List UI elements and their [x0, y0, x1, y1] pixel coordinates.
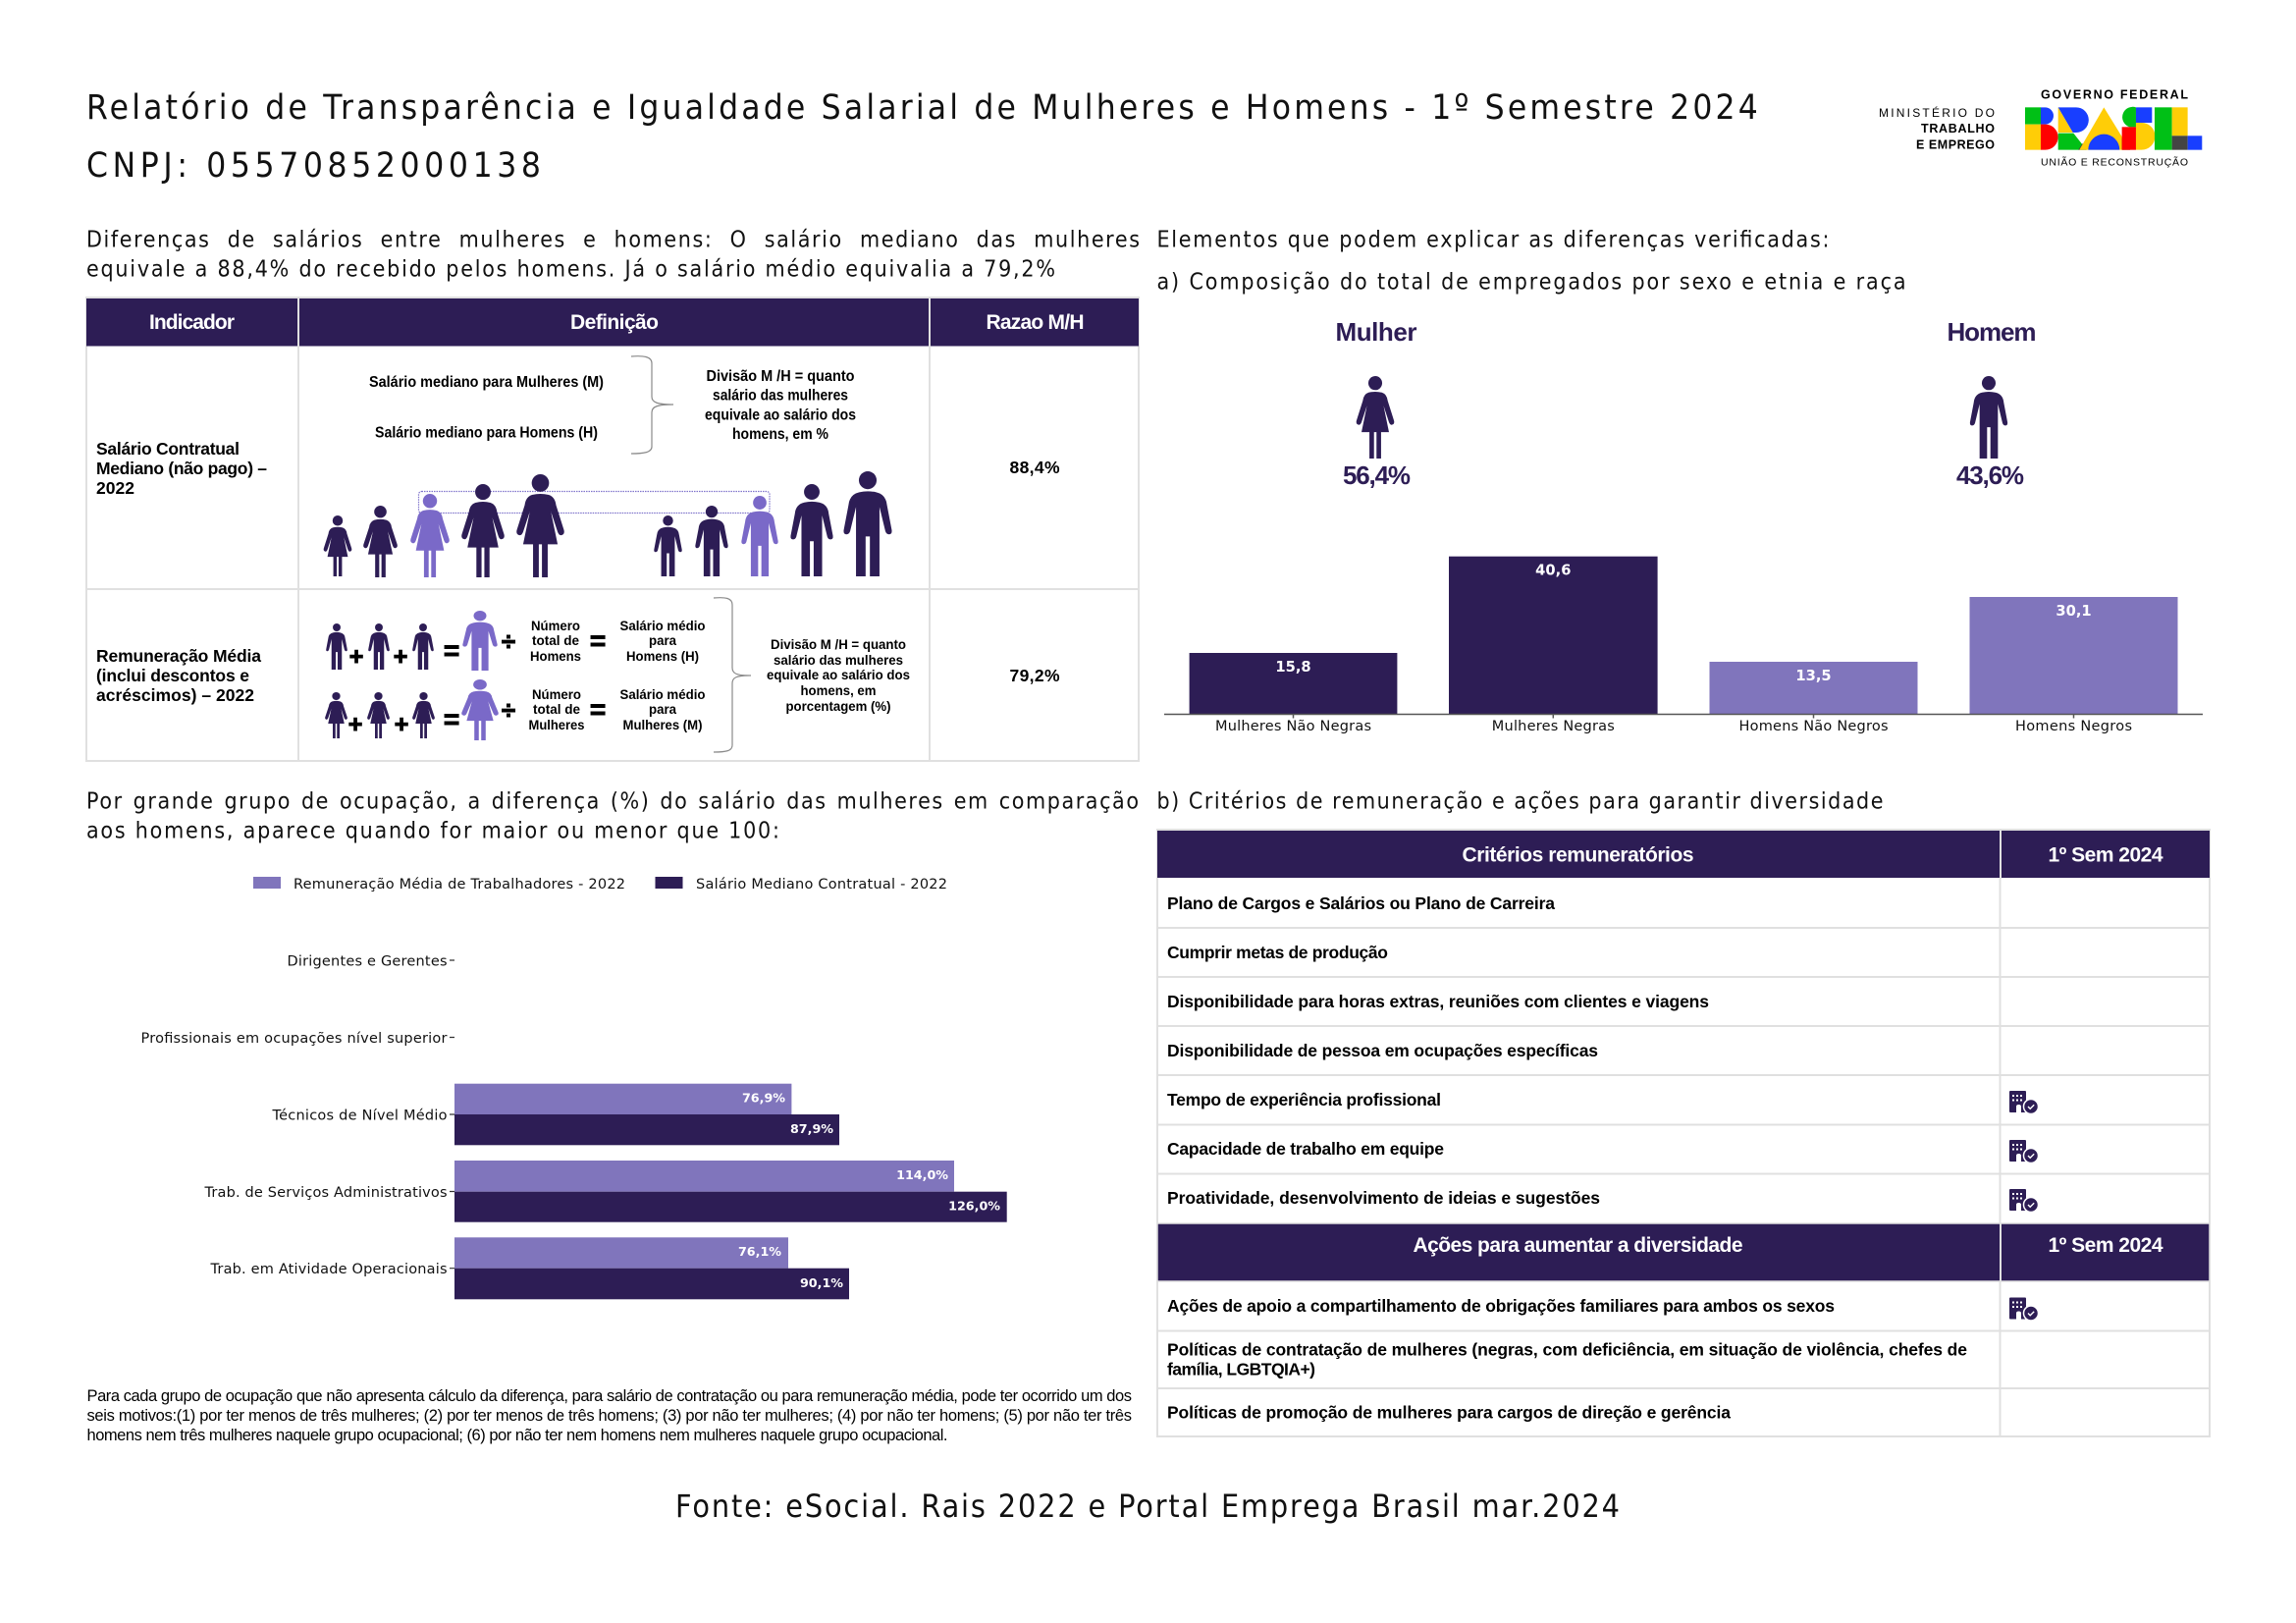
occupation heading [86, 789, 1139, 844]
panel: indicator table [86, 298, 1139, 761]
category labels: Trab. em Atividade Operacionais [210, 1262, 448, 1277]
row 1 indicator label [96, 439, 267, 498]
right column heading [1156, 228, 1906, 296]
panel: men share [1948, 317, 2036, 490]
row 2 formula: men: = [590, 625, 606, 656]
intro text: salary differences [86, 228, 1140, 283]
title [86, 86, 1758, 185]
row 2 brace and division note: salário das mulheres [774, 652, 903, 668]
row 2 formula: men: Salário médio [620, 618, 705, 633]
title: CNPJ: 05570852000138 [86, 144, 541, 185]
row 2 formula: women [325, 679, 705, 740]
row 2 formula: women: + [348, 711, 362, 738]
row 2 formula: men: Homens (H) [626, 648, 699, 664]
diversity rows: Políticas de promoção de mulheres para cargos de direção e gerência [1167, 1402, 1731, 1422]
row 2 formula: men: ÷ [502, 626, 515, 656]
row 2 formula: women: Mulheres [528, 717, 585, 732]
logo: Ministério do Trabalho e Emprego / Governo Federal: UNIÃO E RECONSTRUÇÃO [2041, 155, 2188, 169]
table header: Definição [570, 311, 659, 334]
row 2 formula: women: para [649, 701, 676, 717]
row 2 indicator label [96, 646, 261, 705]
criteria rows: Cumprir metas de produção [1167, 943, 1388, 962]
bars: Trab. em Atividade Operacionais [454, 1237, 849, 1299]
row 2 formula: women: Salário médio [620, 686, 705, 702]
right column heading: Elementos que podem explicar as diferenças verificadas: [1156, 228, 1829, 253]
chart legend: Salário Mediano Contratual - 2022 [696, 877, 947, 893]
icon: building check [2009, 1189, 2038, 1212]
bar: Mulheres Negras: 40,6 [1535, 563, 1571, 579]
bar: Mulheres Não Negras: Mulheres Não Negras [1215, 719, 1371, 734]
panel: men share: 43,6% [1956, 460, 2024, 490]
diversity rows: Ações de apoio a compartilhamento de obrigações familiares para ambos os sexos [1167, 1296, 1835, 1316]
row 2 indicator label: acréscimos) – 2022 [96, 685, 254, 705]
logo: Ministério do Trabalho e Emprego / Governo Federal: E EMPREGO [1916, 137, 1995, 151]
heading b: b) Critérios de remuneração e ações para garantir diversidade [1156, 789, 1883, 815]
bars: Trab. em Atividade Operacionais: 76,1% [738, 1244, 781, 1259]
row 2 formula: men: Número [531, 618, 580, 633]
header: criteria [1157, 830, 2210, 879]
icon: building check [2009, 1140, 2038, 1163]
criteria rows: Disponibilidade para horas extras, reuniões com clientes e viagens [1167, 992, 1709, 1011]
row 2 formula: men: + [394, 643, 407, 671]
header: diversity actions [1157, 1223, 2210, 1281]
criteria rows: Plano de Cargos e Salários ou Plano de Carreira [1167, 893, 1555, 913]
column chart: employees by sex and race [1164, 557, 2203, 734]
row 1 indicator label: Salário Contratual [96, 439, 240, 459]
row 1 definition text: homens, em % [732, 426, 828, 443]
criteria rows: Proatividade, desenvolvimento de ideias e sugestões [1167, 1188, 1600, 1208]
row 1 definition text: equivale ao salário dos [705, 406, 856, 424]
row 2 brace and division note: equivale ao salário dos [767, 667, 910, 682]
bars: Técnicos de Nível Médio: 76,9% [742, 1091, 785, 1106]
bars: Técnicos de Nível Médio [454, 1084, 839, 1145]
footnote: seis motivos:(1) por ter menos de três mulheres; (2) por ter menos de três homens; (3) por não ter mulheres; (4) por não ter homens; (5) por não ter três [86, 1407, 1132, 1425]
row 2 formula: women: ÷ [502, 695, 515, 725]
category labels: Profissionais em ocupações nível superior [141, 1031, 448, 1047]
row 2 formula: men: total de [532, 632, 579, 648]
row 2 formula: women: = [444, 704, 459, 734]
footnote: Para cada grupo de ocupação que não apresenta cálculo da diferença, para salário de contratação ou para remuneração média, pode ter ocorrido um dos [86, 1387, 1132, 1405]
category labels: Trab. de Serviços Administrativos [204, 1185, 448, 1201]
intro text: salary differences: equivale a 88,4% do recebido pelos homens. Já o salário médio equivalia a 79,2% [86, 257, 1055, 283]
table header: Indicador [149, 311, 235, 334]
table header [86, 298, 1139, 347]
panel: women share [1335, 317, 1417, 490]
row 2 formula: men: Homens [530, 648, 581, 664]
table header: Razao M/H [986, 311, 1084, 334]
bars: Trab. de Serviços Administrativos: 114,0% [896, 1167, 948, 1182]
bar: Homens Não Negros: 13,5 [1795, 668, 1832, 684]
category labels: Técnicos de Nível Médio [271, 1108, 448, 1123]
row 1 definition text: Salário mediano para Homens (H) [375, 424, 598, 442]
source line: Fonte: eSocial. Rais 2022 e Portal Emprega Brasil mar.2024 [675, 1489, 1620, 1525]
logo: Ministério do Trabalho e Emprego / Governo Federal [1879, 88, 2202, 169]
row 2 formula: men: + [349, 643, 363, 671]
panel: women share: Mulher [1335, 317, 1417, 347]
category labels: Dirigentes e Gerentes [287, 954, 448, 970]
bar: Homens Negros [1969, 597, 2177, 734]
icon: building check [2009, 1298, 2038, 1321]
bar: Homens Negros: 30,1 [2056, 603, 2092, 620]
row 2 formula: men: para [649, 632, 676, 648]
diversity rows: Políticas de contratação de mulheres (negras, com deficiência, em situação de violência, chefes de [1167, 1339, 1967, 1359]
header: criteria: Critérios remuneratórios [1463, 844, 1694, 866]
row 2 formula: women: Número [532, 686, 581, 702]
row 2 formula: women: = [590, 694, 606, 725]
panel: criteria table [1157, 830, 2210, 1436]
bars: Trab. de Serviços Administrativos [454, 1161, 1007, 1222]
bar: Homens Negros: Homens Negros [2015, 719, 2132, 734]
panel: men share: Homem [1948, 317, 2036, 347]
row 2 formula: men [326, 611, 705, 671]
horizontal bar chart: salary ratio by occupation [141, 954, 1007, 1299]
row 1 definition text [369, 356, 856, 454]
criteria rows: Disponibilidade de pessoa em ocupações específicas [1167, 1041, 1598, 1060]
chart legend [253, 877, 947, 893]
row 2 brace and division note: porcentagem (%) [785, 698, 891, 714]
intro text: salary differences: Diferenças de salários entre mulheres e homens: O salário mediano das mulheres [86, 228, 1140, 253]
icons: women and men salary line-up [324, 471, 892, 577]
row 1 definition text: salário das mulheres [713, 387, 848, 405]
row 2 ratio: 79,2% [1009, 666, 1060, 685]
bars: Trab. de Serviços Administrativos: 126,0% [948, 1198, 1000, 1214]
bar: Homens Não Negros: Homens Não Negros [1739, 719, 1889, 734]
title: Relatório de Transparência e Igualdade Salarial de Mulheres e Homens - 1º Semestre 2024 [86, 86, 1758, 127]
icon: building check [2009, 1091, 2038, 1113]
chart legend: Remuneração Média de Trabalhadores - 2022 [294, 877, 625, 893]
row 2 indicator label: Remuneração Média [96, 646, 261, 666]
logo: Ministério do Trabalho e Emprego / Governo Federal: GOVERNO FEDERAL [2041, 88, 2188, 102]
criteria rows: Tempo de experiência profissional [1167, 1090, 1441, 1109]
footnote: homens nem três mulheres naquele grupo ocupacional; (6) por não ter nem homens nem mulheres naquele grupo ocupacional. [86, 1427, 948, 1444]
criteria rows [1167, 893, 1709, 1208]
row 2 brace and division note: homens, em [801, 682, 876, 698]
row 1 definition text: Salário mediano para Mulheres (M) [369, 374, 604, 391]
row 1 ratio: 88,4% [1009, 458, 1060, 477]
header: diversity actions: 1º Sem 2024 [2048, 1234, 2163, 1257]
row 2 formula: women: + [395, 711, 408, 738]
bars: Trab. em Atividade Operacionais: 90,1% [800, 1275, 843, 1290]
bar: Homens Não Negros [1710, 662, 1918, 734]
occupation heading: Por grande grupo de ocupação, a diferença (%) do salário das mulheres em comparação [86, 789, 1139, 815]
row 2 indicator label: (inclui descontos e [96, 666, 249, 685]
category labels [141, 954, 454, 1277]
row 1 indicator label: 2022 [96, 478, 134, 498]
row 2 brace and division note [714, 598, 910, 752]
right column heading: a) Composição do total de empregados por sexo e etnia e raça [1156, 270, 1906, 296]
row 1 definition text: Divisão M /H = quanto [707, 368, 854, 385]
occupation heading: aos homens, aparece quando for maior ou menor que 100: [86, 819, 779, 844]
header: criteria: 1º Sem 2024 [2048, 844, 2163, 866]
bars: Técnicos de Nível Médio: 87,9% [790, 1121, 833, 1136]
footnote [86, 1387, 1132, 1444]
bar: Mulheres Não Negras [1190, 653, 1397, 734]
row 2 formula: men: = [444, 635, 459, 666]
logo: Ministério do Trabalho e Emprego / Governo Federal: TRABALHO [1921, 122, 1995, 135]
criteria rows: Capacidade de trabalho em equipe [1167, 1139, 1444, 1159]
row 2 formula: women: total de [533, 701, 580, 717]
bar: Mulheres Negras [1449, 557, 1658, 734]
row 2 formula: women: Mulheres (M) [622, 717, 703, 732]
bar: Mulheres Não Negras: 15,8 [1275, 659, 1311, 676]
logo: Ministério do Trabalho e Emprego / Governo Federal: MINISTÉRIO DO [1879, 105, 1995, 120]
header: diversity actions: Ações para aumentar a diversidade [1414, 1234, 1743, 1257]
bar: Mulheres Negras: Mulheres Negras [1492, 719, 1615, 734]
row 2 brace and division note: Divisão M /H = quanto [771, 636, 906, 652]
diversity rows [1167, 1296, 1967, 1422]
panel: women share: 56,4% [1343, 460, 1411, 490]
row 1 indicator label: Mediano (não pago) – [96, 459, 267, 478]
diversity rows: família, LGBTQIA+) [1167, 1359, 1315, 1379]
